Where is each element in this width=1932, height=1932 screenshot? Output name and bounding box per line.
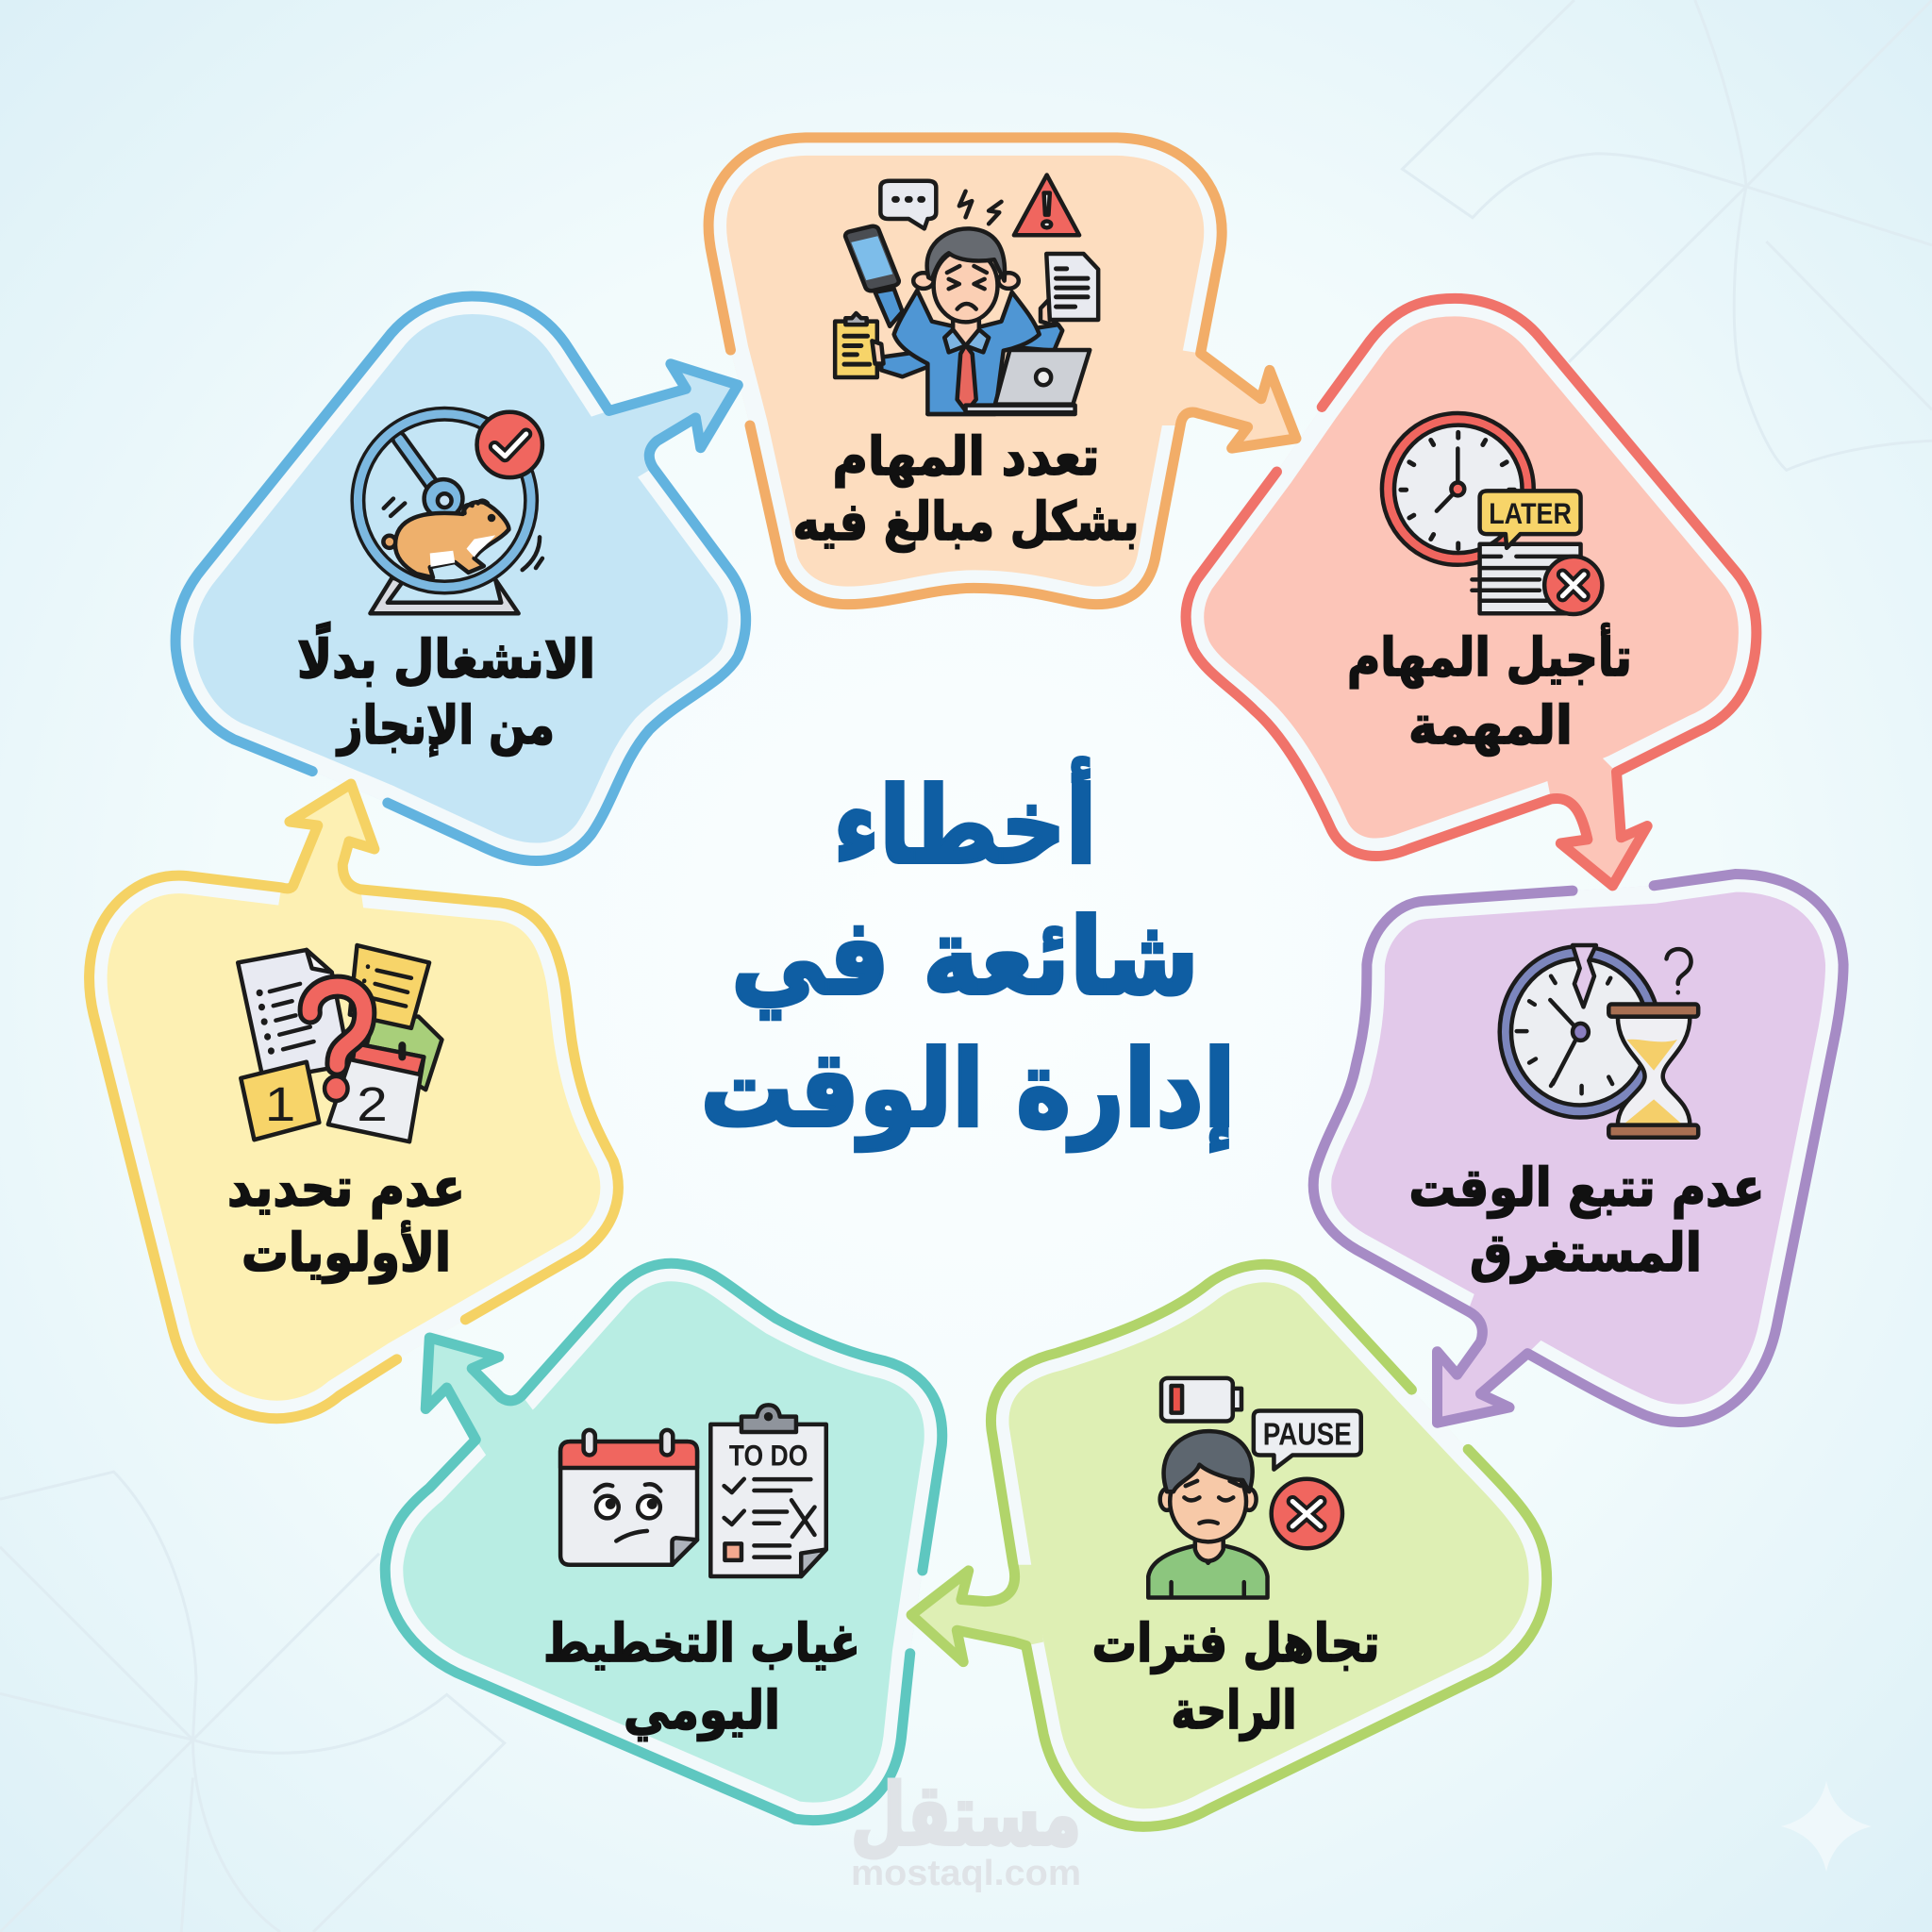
arrow and outline: purple: [1313, 874, 1843, 1423]
heading: panel 2: المهمة: [1408, 695, 1573, 757]
heading: panel 7: الانشغال بدلًا: [297, 622, 595, 691]
panel body: planning: [403, 1281, 924, 1803]
panel body: procrastination: [1204, 316, 1739, 838]
title: شائعة في: [731, 896, 1199, 1020]
watermark: [851, 1766, 1081, 1893]
panel body: multitasking: [726, 155, 1204, 587]
panel body: time tracking: [1331, 886, 1825, 1404]
heading: panel 3: عدم تتبع الوقت: [1409, 1158, 1764, 1219]
heading: panel 4: تجاهل فترات: [1092, 1613, 1379, 1674]
icon: broken clock and hourglass: [1500, 945, 1698, 1138]
icon: sparkle: [1781, 1781, 1872, 1872]
heading: panel 5: اليومي: [624, 1680, 780, 1741]
panel body: rest: [1009, 1282, 1529, 1809]
heading: panel 1: بشكل مبالغ فيه: [792, 491, 1140, 553]
panel body: priorities: [108, 893, 600, 1401]
icon: tired man with battery and PAUSE: [1148, 1378, 1361, 1598]
panel body: busyness: [193, 314, 728, 843]
heading: panel 1: تعدد المهام: [832, 426, 1100, 488]
icon: hamster on wheel: [358, 412, 542, 613]
watermark: مستقل: [851, 1766, 1081, 1865]
heading: panel 7: [297, 622, 595, 757]
heading: panel 2: تأجيل المهام: [1347, 623, 1632, 689]
arrow and outline: teal: [385, 1263, 942, 1821]
icon: tired man with battery and PAUSE: PAUSE: [1263, 1416, 1352, 1452]
icon: confused calendar and to-do list: [560, 1405, 826, 1576]
watermark: mostaql.com: [851, 1854, 1081, 1893]
heading: panel 3: [1409, 1158, 1764, 1284]
title: أخطاء: [834, 758, 1096, 888]
heading: panel 6: عدم تحديد: [227, 1158, 465, 1219]
icon: confused calendar and to-do list: TO DO: [729, 1439, 808, 1472]
heading: panel 4: الراحة: [1172, 1680, 1296, 1741]
heading: panel 7: من الإنجاز: [336, 695, 555, 757]
icon: confused papers with question mark: 1: [265, 1077, 295, 1131]
heading: panel 1: [792, 426, 1140, 553]
arrow and outline: red: [1186, 298, 1757, 886]
icon: confused papers with question mark: [238, 945, 441, 1141]
icon: clock with LATER bubble: [1382, 413, 1602, 614]
title: [700, 758, 1236, 1152]
arrow and outline: green: [911, 1264, 1547, 1826]
icon: clock with LATER bubble: LATER: [1489, 496, 1572, 530]
heading: panel 4: [1092, 1613, 1379, 1741]
heading: panel 6: الأولويات: [242, 1220, 451, 1284]
heading: panel 2: [1347, 623, 1632, 757]
heading: panel 6: [227, 1158, 465, 1284]
icon: confused papers with question mark: 2: [357, 1077, 388, 1131]
icon: stressed multitasking man: [835, 175, 1098, 414]
arrow and outline: yellow: [90, 784, 618, 1419]
arrow and outline: orange: [708, 138, 1296, 605]
heading: panel 5: [543, 1613, 860, 1741]
title: إدارة الوقت: [700, 1028, 1236, 1152]
heading: panel 3: المستغرق: [1470, 1223, 1702, 1284]
heading: panel 5: غياب التخطيط: [543, 1613, 860, 1674]
arrow and outline: blue: [175, 296, 746, 861]
